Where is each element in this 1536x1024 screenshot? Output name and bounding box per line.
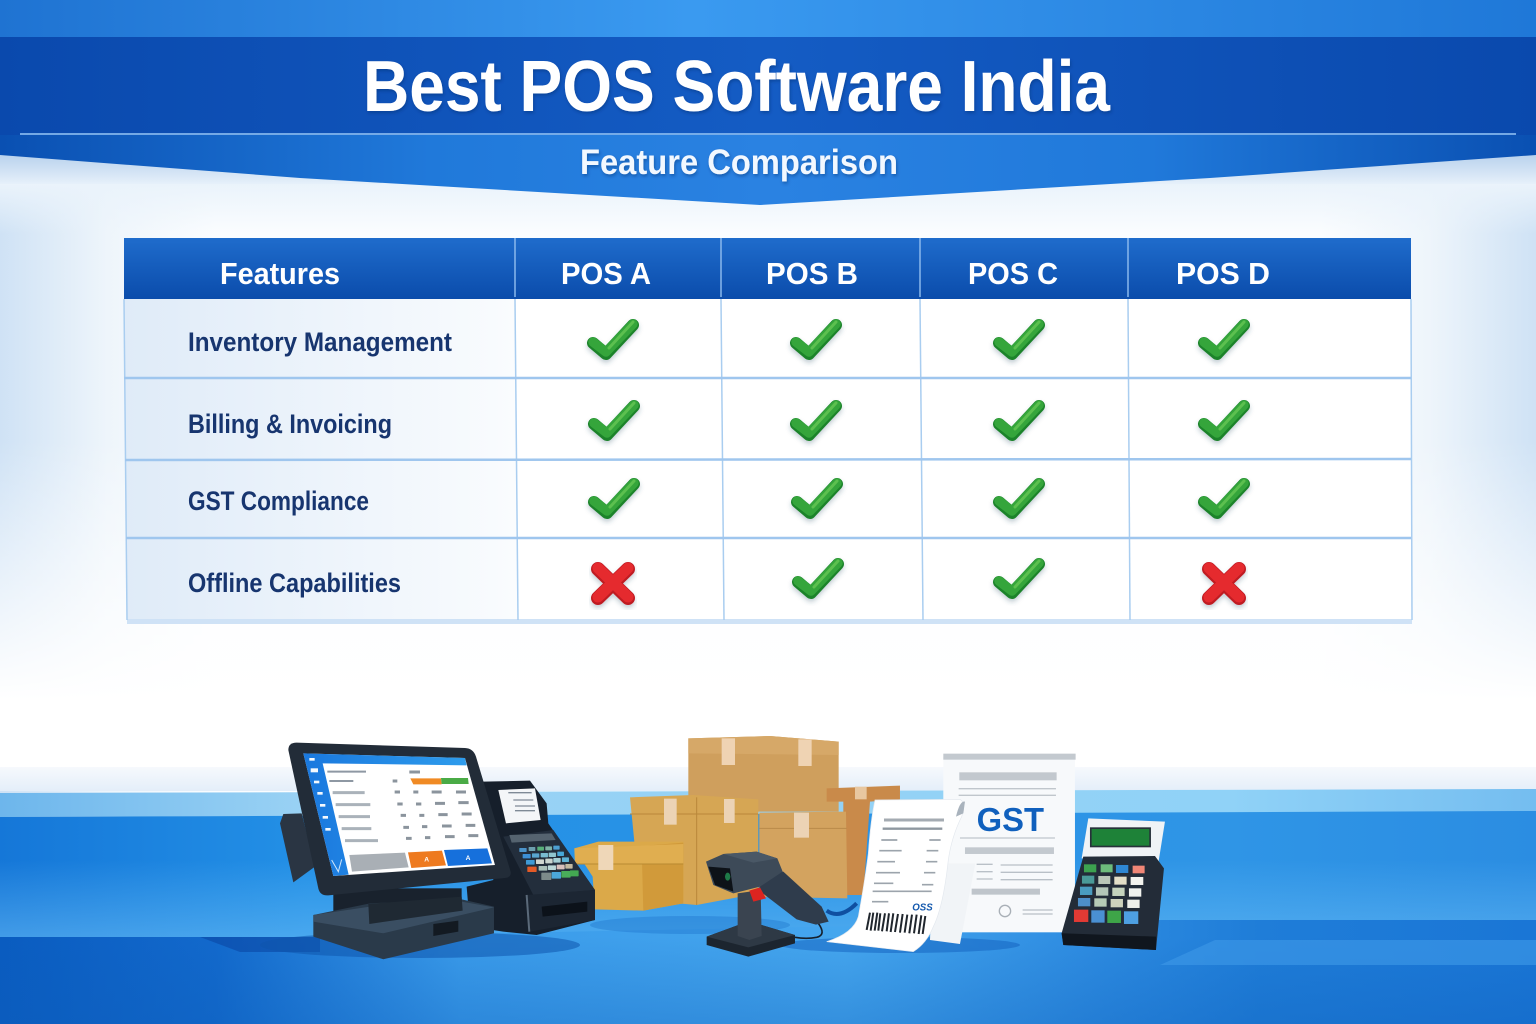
illustration: POS touchscreen monitor <box>280 743 511 959</box>
row: Offline Capabilities <box>188 561 1239 598</box>
row: Offline Capabilities: Offline Capabilities <box>188 568 401 598</box>
table header: POS A <box>561 256 651 291</box>
title: Best POS Software India <box>363 47 1111 127</box>
illustration: calculator keypad <box>1062 818 1165 950</box>
comparison table <box>124 238 1412 624</box>
receipt with barcode: OSS <box>912 902 933 913</box>
row: Inventory Management: Inventory Management <box>188 327 452 357</box>
scanner body <box>706 852 829 925</box>
row: GST Compliance: GST Compliance <box>188 486 369 516</box>
keypad <box>519 846 579 880</box>
illustration: receipt printer terminal <box>467 781 595 935</box>
row: Billing & Invoicing <box>188 403 1244 439</box>
scanner stand <box>707 890 795 957</box>
GST document: GST <box>977 802 1044 839</box>
row: GST Compliance <box>188 481 1244 516</box>
table header: POS B <box>766 256 858 291</box>
blue counter floor <box>0 767 1536 1024</box>
table header: POS C <box>968 256 1058 291</box>
subtitle: Feature Comparison <box>580 143 898 182</box>
header banner <box>0 0 1536 205</box>
base <box>313 888 494 959</box>
screen: A <box>424 857 429 864</box>
table header <box>124 238 1411 299</box>
row: Billing & Invoicing: Billing & Invoicing <box>188 409 392 439</box>
screen: A <box>466 855 471 862</box>
box: back top <box>688 736 839 812</box>
printed slip <box>498 788 541 823</box>
row: Inventory Management <box>188 322 1244 357</box>
illustration: barcode scanner <box>706 852 829 957</box>
receipt with barcode <box>827 799 965 952</box>
monitor bezel <box>288 743 511 895</box>
illustration: GST document and receipt <box>827 754 1076 952</box>
box: front small <box>574 842 683 911</box>
box: orange back right <box>827 786 900 895</box>
box: centre left <box>630 795 758 905</box>
floor cable <box>827 903 857 914</box>
screen <box>303 753 495 876</box>
second receipt sheet <box>930 863 975 944</box>
box: centre right <box>759 812 847 898</box>
table header: POS D <box>1176 256 1270 291</box>
GST document <box>943 754 1076 932</box>
illustration: cardboard boxes <box>630 736 900 905</box>
table body <box>124 299 1412 624</box>
table header: Features <box>220 256 340 291</box>
card reader <box>280 813 315 882</box>
